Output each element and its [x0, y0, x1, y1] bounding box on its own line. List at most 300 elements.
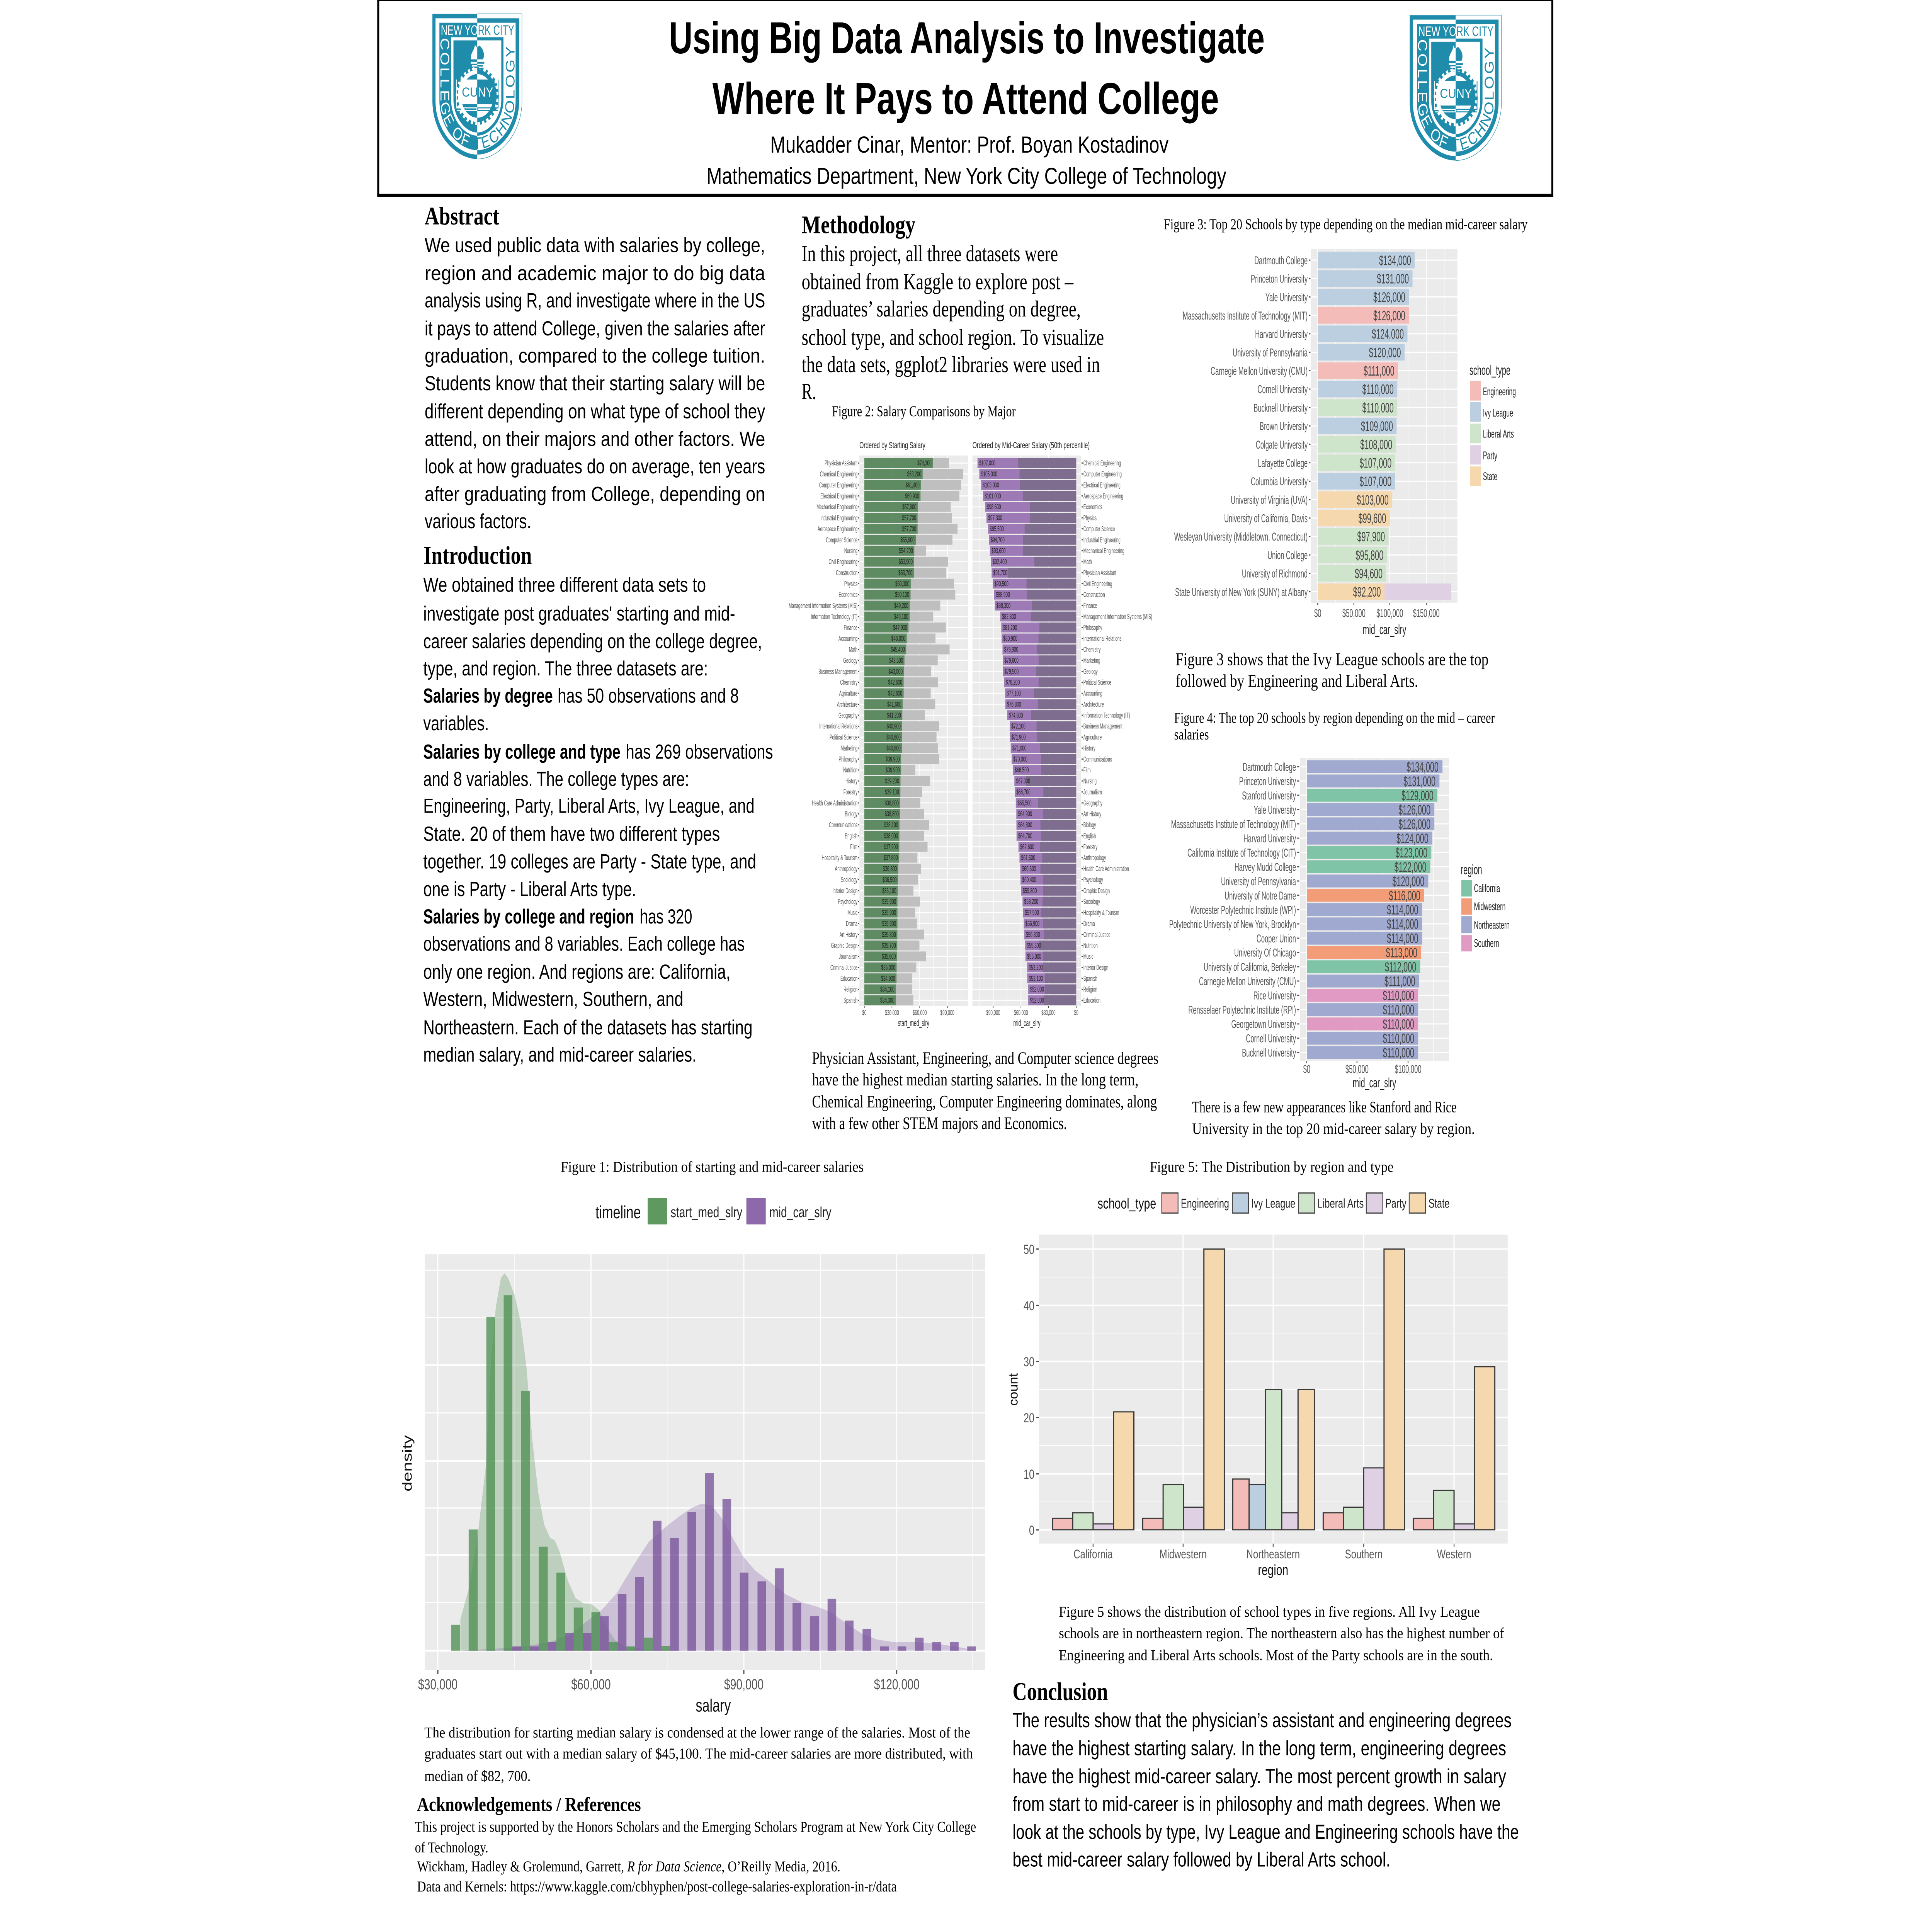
- text: introduction body: Northeastern. Each of the datasets has starting: [423, 1016, 753, 1039]
- axis labels: school names by type: Princeton University: [1251, 273, 1308, 286]
- bars: mid-career salary in gray: [864, 458, 963, 1005]
- text: introduction body: career salaries depending on the college degree,: [423, 630, 762, 653]
- value labels: schools by type: $110,000: [1362, 382, 1394, 397]
- value labels: mid-career salary: $68,500: [1015, 766, 1029, 774]
- axis labels: school names by region: Harvard University: [1243, 832, 1296, 845]
- value labels: mid-career salary: $60,400: [1022, 876, 1036, 884]
- value labels: schools by region: $129,000: [1401, 788, 1434, 803]
- axis labels: majors by mid-career salary: Anthropology: [1083, 854, 1106, 862]
- legend: school type: school_type: [1097, 1196, 1156, 1212]
- axis labels: majors by starting salary: Political Science: [830, 734, 857, 742]
- axis labels: school names by region: Bucknell University: [1242, 1047, 1296, 1060]
- text: figure 2 description: Physician Assistant, Engineering, and Computer science degrees: [812, 1049, 1158, 1068]
- axis labels: school names by region: Massachusetts Institute of Technology (MIT): [1171, 818, 1296, 831]
- axis labels: majors by mid-career salary: Architecture: [1083, 701, 1104, 709]
- value labels: schools by type: $131,000: [1377, 272, 1409, 287]
- axis labels: majors by starting salary: Anthropology: [835, 866, 857, 873]
- axis labels: majors by mid-career salary: Industrial Engineering: [1083, 536, 1121, 544]
- axis labels: school names by region: Stanford University: [1242, 789, 1296, 802]
- text: methodology body: In this project, all three datasets were: [802, 242, 1058, 267]
- value labels: schools by region: [1383, 760, 1439, 1061]
- x axis: mid-career salary: $0: [1074, 1009, 1078, 1017]
- bars: mid-career salary in light purple: [978, 458, 1076, 1005]
- text: conclusion body: have the highest mid-career salary. The most percent growth in salary: [1012, 1765, 1507, 1787]
- text: introduction body: Salaries by degree: [423, 684, 553, 707]
- value labels: schools by region: $110,000: [1383, 1003, 1414, 1018]
- value labels: starting salary: $63,200: [907, 470, 921, 478]
- x axis: starting salary: [862, 1006, 954, 1029]
- x axis: mid-career salary: mid_car_slry: [1014, 1018, 1041, 1029]
- value labels: schools by region: $110,000: [1383, 1031, 1414, 1046]
- chart: top schools by type: [1174, 249, 1516, 638]
- text: introduction body: investigate post graduates' starting and mid-: [423, 602, 735, 625]
- panel: introduction: [423, 542, 773, 1066]
- axis labels: majors by mid-career salary: Chemical Engineering: [1083, 460, 1121, 468]
- text: introduction body: observations and 8 variables. Each college has: [423, 932, 745, 955]
- icon: left college seal: CUNY: [462, 85, 493, 100]
- text: references: Data and Kernels: https://www.kaggle.com/cbhyphen/post-college-salaries-exploration-in-r/data: [417, 1878, 897, 1895]
- value labels: mid-career salary: $82,300: [1002, 613, 1016, 621]
- axis labels: majors by starting salary: Geology: [843, 657, 857, 665]
- value labels: mid-career salary: $56,300: [1026, 931, 1040, 939]
- value labels: starting salary: $53,900: [899, 558, 913, 566]
- axis labels: school names by region: Yale University: [1254, 804, 1296, 816]
- axis labels: majors by starting salary: Art History: [840, 931, 857, 939]
- legend: school type: Liberal Arts: [1318, 1196, 1364, 1211]
- text: introduction body: Salaries by college and region: [423, 905, 634, 928]
- chart title: ordered by mid-career salary: Ordered by Mid-Career Salary (50th percentile): [973, 440, 1090, 451]
- legend: timeline: start_med_slry: [671, 1204, 742, 1221]
- axis labels: majors by starting salary: Philosophy: [839, 756, 857, 764]
- axis labels: school names by region: Rice University: [1253, 990, 1296, 1002]
- axis labels: majors by mid-career salary: Spanish: [1083, 975, 1097, 983]
- axis labels: school names by region: University of Notre Dame: [1225, 889, 1296, 902]
- value labels: schools by region: $122,000: [1395, 860, 1427, 875]
- value labels: starting salary: $74,300: [917, 459, 932, 468]
- axis labels: school names by region: [1169, 761, 1298, 1060]
- value labels: starting salary: $38,800: [885, 799, 899, 807]
- text: introduction body: together. 19 colleges are Party - State type, and: [423, 850, 756, 873]
- value labels: schools by region: $131,000: [1403, 774, 1435, 789]
- axis labels: majors by starting salary: Drama: [846, 920, 858, 928]
- axis labels: majors by mid-career salary: Geology: [1083, 668, 1098, 676]
- value labels: starting salary: $35,000: [881, 964, 895, 972]
- value labels: starting salary: $39,200: [885, 777, 899, 786]
- caption: figure 4: salaries: [1174, 726, 1209, 743]
- value labels: starting salary: $35,900: [882, 909, 896, 917]
- value labels: starting salary: $41,200: [887, 711, 901, 719]
- axis labels: majors by starting salary: English: [845, 832, 857, 840]
- axis labels: majors by mid-career salary: Psychology: [1083, 876, 1103, 884]
- axis labels: school names by type: University of Pennsylvania: [1233, 346, 1308, 359]
- value labels: mid-career salary: $61,500: [1021, 854, 1035, 862]
- value labels: starting salary: $39,900: [886, 766, 900, 774]
- header banner: [377, 0, 1553, 197]
- value labels: mid-career salary: $79,600: [1005, 656, 1019, 665]
- value labels: starting salary: $38,000: [884, 832, 898, 840]
- x axis: schools by region: [1303, 1061, 1422, 1091]
- x axis: salary: [418, 1670, 920, 1716]
- axis labels: majors by starting salary: Economics: [839, 591, 857, 599]
- heading: abstract: Abstract: [425, 202, 499, 230]
- axis labels: school names by type: Wesleyan University (Middletown, Connecticut): [1174, 531, 1308, 544]
- density and histogram plot: [451, 1273, 976, 1651]
- axis labels: school names by region: Rensselaer Polytechnic Institute (RPI): [1188, 1004, 1296, 1017]
- value labels: starting salary: $46,000: [891, 635, 905, 643]
- axis labels: majors by starting salary: Physician Assistant: [825, 460, 858, 468]
- text: figure 5 description: [1059, 1604, 1505, 1664]
- value labels: starting salary: $36,100: [882, 887, 896, 895]
- legend: school type: Party: [1483, 449, 1497, 462]
- text: abstract body: it pays to attend College, given the salaries after: [425, 317, 765, 340]
- value labels: mid-career salary: $55,000: [1027, 952, 1041, 961]
- text: methodology body: the data sets, ggplot2 libraries were used in: [802, 352, 1100, 378]
- value labels: schools by type: $120,000: [1369, 345, 1401, 361]
- value labels: schools by type: $109,000: [1361, 419, 1393, 434]
- x axis: schools by type: $100,000: [1376, 607, 1403, 620]
- x axis: schools by region: $100,000: [1395, 1063, 1422, 1076]
- axis labels: school names by type: University of California, Davis: [1224, 512, 1308, 525]
- axis labels: majors by starting salary: Education: [840, 975, 857, 983]
- axis labels: majors by starting salary: Architecture: [837, 701, 857, 709]
- value labels: mid-career salary: $57,500: [1025, 909, 1039, 917]
- axis labels: majors by mid-career salary: International Relations: [1083, 635, 1122, 643]
- x axis: salary: $120,000: [874, 1677, 920, 1693]
- value labels: schools by type: $103,000: [1357, 493, 1389, 508]
- value labels: mid-career salary: $70,000: [1013, 755, 1027, 764]
- value labels: schools by region: $110,000: [1383, 1046, 1414, 1061]
- text: abstract body: We used public data with salaries by college,: [425, 234, 765, 257]
- value labels: schools by type: $124,000: [1372, 327, 1404, 342]
- legend: school type: Engineering: [1483, 385, 1516, 398]
- axis labels: majors by starting salary: Mechanical Engineering: [816, 503, 857, 511]
- legend: region: region: [1461, 862, 1482, 878]
- axis labels: majors by mid-career salary: Management Information Systems (MIS): [1083, 613, 1152, 621]
- value labels: schools by region: $111,000: [1384, 974, 1415, 989]
- value labels: mid-career salary: $105,000: [981, 470, 997, 478]
- text: references: [415, 1818, 976, 1895]
- title line 2: Where It Pays to Attend College: [713, 73, 1219, 124]
- axis labels: school names by region: Georgetown University: [1231, 1018, 1296, 1031]
- text: figure 1 description: The distribution for starting median salary is condensed at the lower range of the salaries. Most of the: [424, 1724, 970, 1741]
- value labels: mid-career salary: $71,000: [1012, 744, 1026, 752]
- histogram: mid-career salary: [512, 1473, 976, 1651]
- axis labels: majors by mid-career salary: Hospitality & Tourism: [1083, 909, 1119, 917]
- axis labels: school names by type: Union College: [1267, 549, 1308, 562]
- bars: starting salary in green: [864, 458, 933, 1005]
- axis labels: school names by type: Yale University: [1265, 291, 1308, 304]
- value labels: starting salary: $60,900: [905, 492, 919, 500]
- value labels: starting salary: $43,000: [889, 668, 903, 676]
- value labels: mid-career salary: $81,200: [1003, 624, 1017, 632]
- axis labels: majors by starting salary: Business Management: [818, 668, 858, 676]
- chart: distribution of starting and mid-career salaries: [400, 1198, 985, 1716]
- axis labels: school names by type: Carnegie Mellon University (CMU): [1211, 365, 1308, 378]
- text: figure 2 description: [812, 1049, 1158, 1133]
- axis labels: school names by region: Carnegie Mellon University (CMU): [1199, 975, 1296, 988]
- axis labels: majors by starting salary: Finance: [844, 624, 857, 632]
- text: introduction body: has 50 observations and 8: [558, 684, 739, 707]
- axis labels: majors by starting salary: Journalism: [839, 953, 857, 961]
- value labels: schools by type: $94,600: [1355, 566, 1383, 582]
- x axis: schools by type: [1314, 603, 1440, 638]
- axis labels: majors by mid-career salary: Mechanical Engineering: [1083, 548, 1124, 555]
- value labels: starting salary: $40,900: [887, 723, 901, 731]
- axis labels: majors by starting salary: Agriculture: [839, 690, 857, 698]
- value labels: schools by region: $114,000: [1387, 903, 1418, 918]
- axis labels: majors by starting salary: Electrical Engineering: [820, 493, 857, 500]
- axis labels: majors by mid-career salary: Civil Engineering: [1083, 580, 1112, 588]
- icon: right college seal: NEW YORK CITY: [1418, 24, 1493, 39]
- axis labels: school names by type: Bucknell University: [1253, 402, 1308, 415]
- axis labels: majors by starting salary: Aerospace Engineering: [818, 526, 857, 533]
- value labels: mid-career salary: $53,200: [1029, 964, 1043, 972]
- value labels: starting salary: $38,800: [885, 810, 899, 818]
- value labels: mid-career salary: $74,800: [1009, 711, 1023, 719]
- axis labels: school names by type: Dartmouth College: [1254, 254, 1308, 267]
- legend: school type: Party: [1385, 1196, 1406, 1211]
- text: methodology body: [802, 242, 1104, 404]
- caption: figure 4: [1174, 709, 1495, 743]
- value labels: starting salary: $42,600: [888, 689, 902, 698]
- heading: conclusion: Conclusion: [1012, 1678, 1108, 1706]
- text: figure 5 description: Engineering and Liberal Arts schools. Most of the Party schools are in the south.: [1059, 1647, 1493, 1664]
- axis labels: school names by type: Lafayette College: [1258, 457, 1308, 470]
- text: conclusion body: have the highest starting salary. In the long term, engineering degrees: [1012, 1737, 1506, 1760]
- axis labels: majors by starting salary: Geography: [838, 712, 857, 719]
- chart: distribution by region and type: [1006, 1193, 1508, 1578]
- title line 1: Using Big Data Analysis to Investigate: [669, 13, 1265, 63]
- panel: methodology: [802, 211, 1104, 404]
- y axis title: density: density: [400, 1435, 415, 1492]
- text: introduction body: has 320: [640, 905, 692, 928]
- x axis: schools by type: mid_car_slry: [1363, 622, 1406, 638]
- value labels: mid-career salary: $78,200: [1006, 679, 1020, 687]
- axis labels: majors by starting salary: Chemical Engineering: [820, 471, 857, 478]
- text: abstract body: graduation, compared to the college tuition.: [425, 344, 765, 367]
- text: references: Wickham, Hadley & Grolemund, Garrett, R for Data Science , O’Reilly Media, 2016.: [417, 1858, 840, 1875]
- value labels: starting salary: $40,800: [886, 744, 901, 752]
- legend: school type: Liberal Arts: [1483, 428, 1514, 440]
- axis labels: majors by starting salary: Computer Science: [826, 536, 857, 544]
- value labels: starting salary: $61,400: [905, 481, 920, 489]
- icon: right college seal: CUNY: [1440, 86, 1472, 101]
- text: introduction body: Western, Midwestern, Southern, and: [423, 988, 683, 1010]
- axis labels: majors by mid-career salary: Physician Assistant: [1083, 569, 1116, 577]
- x axis: region: region: [1258, 1562, 1288, 1578]
- text: introduction body: and 8 variables. The college types are:: [423, 767, 689, 790]
- value labels: mid-career salary: $55,300: [1027, 942, 1041, 950]
- axis labels: majors by starting salary: Accounting: [838, 635, 857, 643]
- value labels: mid-career salary: $93,600: [992, 547, 1005, 555]
- value labels: starting salary: $36,800: [883, 865, 897, 873]
- axis labels: majors by mid-career salary: Education: [1083, 997, 1100, 1005]
- axis labels: majors by mid-career salary: Geography: [1083, 799, 1102, 807]
- text: introduction body: [423, 573, 773, 1066]
- y axis: count: 30: [1024, 1355, 1034, 1369]
- text: conclusion body: from start to mid-career is in philosophy and math degrees. When we: [1012, 1793, 1501, 1815]
- text: figure 5 description: schools are in northeastern region. The northeastern also has the highest number of: [1059, 1625, 1505, 1642]
- value labels: schools by type: $95,800: [1355, 548, 1383, 563]
- text: figure 2 description: Chemical Engineering, Computer Engineering dominates, along: [812, 1092, 1157, 1111]
- x axis: schools by region: $0: [1303, 1063, 1310, 1076]
- axis labels: majors by starting salary: Physics: [844, 580, 857, 588]
- x axis: salary: $90,000: [724, 1677, 764, 1693]
- axis labels: majors by starting salary: Spanish: [844, 997, 857, 1005]
- text: conclusion body: [1012, 1709, 1519, 1871]
- text: conclusion body: best mid-career salary followed by Liberal Arts school.: [1012, 1848, 1390, 1871]
- value labels: schools by region: $120,000: [1392, 874, 1424, 889]
- x axis: mid-career salary: $30,000: [1041, 1009, 1056, 1017]
- y axis: count: [1006, 1243, 1039, 1538]
- bars: school type counts by region: [1053, 1249, 1495, 1530]
- value labels: schools by type: $97,900: [1357, 529, 1385, 545]
- value labels: mid-career salary: $59,800: [1023, 887, 1037, 895]
- x axis: salary: $30,000: [418, 1677, 457, 1693]
- axis labels: school names by region: University of California, Berkeley: [1204, 961, 1296, 974]
- value labels: mid-career salary: $95,500: [990, 525, 1004, 533]
- panel: acknowledgements and references: [415, 1793, 976, 1895]
- axis labels: school names by region: Worcester Polytechnic Institute (WPI): [1190, 904, 1296, 917]
- text: methodology body: graduates’ salaries depending on degree,: [802, 297, 1081, 322]
- value labels: schools by type: $126,000: [1373, 308, 1405, 324]
- text: figure 1 description: [424, 1724, 973, 1784]
- legend: school type: Ivy League: [1251, 1196, 1295, 1211]
- axis labels: school names by type: Columbia University: [1251, 475, 1308, 488]
- axis labels: majors by starting salary: Math: [849, 646, 857, 654]
- value labels: mid-career salary: $58,200: [1024, 898, 1038, 906]
- x axis: mid-career salary: $60,000: [1014, 1009, 1028, 1017]
- value labels: mid-career salary: $79,500: [1005, 668, 1019, 676]
- x axis: mid-career salary: $90,000: [986, 1009, 1000, 1017]
- x axis: starting salary: $90,000: [940, 1009, 954, 1017]
- value labels: starting salary: $39,900: [886, 755, 900, 764]
- axis labels: majors by mid-career salary: Finance: [1083, 602, 1097, 610]
- x axis: region: Western: [1437, 1548, 1471, 1561]
- axis labels: majors by mid-career salary: English: [1083, 832, 1096, 840]
- text: introduction body: median salary, and mid-career salaries.: [423, 1043, 696, 1066]
- legend: region: Southern: [1474, 937, 1499, 949]
- x axis: region: Southern: [1345, 1548, 1383, 1561]
- y axis: count: 20: [1024, 1411, 1034, 1425]
- value labels: mid-career salary: $94,700: [990, 536, 1005, 544]
- value labels: starting salary: $47,900: [893, 624, 907, 632]
- value labels: mid-career salary: $80,900: [1003, 635, 1017, 643]
- text: figure 3 description: followed by Engineering and Liberal Arts.: [1175, 671, 1418, 691]
- axis labels: majors by mid-career salary: Computer Engineering: [1083, 471, 1122, 478]
- value labels: mid-career salary: $90,500: [995, 580, 1009, 588]
- panel: mid-career salary bars: [973, 456, 1152, 1029]
- x axis: region: Northeastern: [1247, 1548, 1300, 1561]
- value labels: starting salary: $54,200: [899, 547, 913, 555]
- axis labels: school names by region: California Institute of Technology (CIT): [1187, 847, 1296, 859]
- value labels: mid-career salary: $56,900: [1026, 920, 1039, 928]
- axis labels: majors by mid-career salary: Construction: [1083, 591, 1105, 599]
- y axis: count: 0: [1029, 1524, 1034, 1538]
- value labels: starting salary: $35,900: [882, 898, 896, 906]
- text: introduction body: one is Party - Liberal Arts type.: [423, 878, 636, 901]
- heading: introduction: Introduction: [423, 542, 532, 570]
- value labels: schools by region: $110,000: [1383, 1017, 1414, 1032]
- authors: Mukadder Cinar, Mentor: Prof. Boyan Kostadinov: [770, 132, 1168, 158]
- text: introduction body: type, and region. The three datasets are:: [423, 657, 708, 680]
- value labels: schools by region: $110,000: [1383, 988, 1414, 1003]
- value labels: starting salary: $43,500: [889, 656, 903, 665]
- value labels: starting salary: $42,600: [888, 679, 902, 687]
- text: introduction body: State. 20 of them have two different types: [423, 822, 720, 845]
- y axis: count: 50: [1024, 1243, 1034, 1257]
- x axis: schools by region: mid_car_slry: [1353, 1075, 1396, 1091]
- text: conclusion body: The results show that the physician’s assistant and engineering degrees: [1012, 1709, 1512, 1731]
- axis labels: school names by region: Princeton University: [1239, 775, 1296, 788]
- value labels: mid-career salary: $66,700: [1016, 788, 1031, 796]
- panel: abstract: [425, 202, 765, 532]
- text: abstract body: look at how graduates do on average, ten years: [425, 455, 765, 478]
- legend: region: Midwestern: [1474, 900, 1505, 913]
- chart: salary comparisons by major: [789, 440, 1152, 1029]
- axis labels: majors by starting salary: Civil Engineering: [829, 558, 857, 566]
- axis labels: school names by region: Harvey Mudd College: [1235, 861, 1296, 874]
- value labels: schools by type: [1353, 253, 1411, 600]
- value labels: starting salary: $35,600: [882, 952, 896, 961]
- axis labels: majors by starting salary: History: [845, 778, 857, 786]
- text: references: This project is supported by the Honors Scholars and the Emerging Scholars Program at New York City College: [415, 1818, 976, 1835]
- value labels: schools by type: $134,000: [1379, 253, 1411, 268]
- axis labels: majors by mid-career salary: Forestry: [1083, 844, 1098, 851]
- value labels: schools by type: $99,600: [1359, 511, 1386, 526]
- caption: figure 3: Figure 3: Top 20 Schools by type depending on the median mid-career salary: [1164, 216, 1528, 233]
- text: abstract body: different depending on what type of school they: [425, 400, 765, 423]
- value labels: schools by region: $124,000: [1396, 831, 1429, 846]
- value labels: starting salary: $36,500: [883, 876, 896, 884]
- value labels: starting salary: $35,800: [882, 931, 896, 939]
- caption: figure 1: Figure 1: Distribution of starting and mid-career salaries: [561, 1158, 864, 1175]
- axis labels: school names by type: [1174, 254, 1310, 599]
- legend: region: California: [1474, 882, 1500, 895]
- value labels: starting salary: $35,900: [882, 920, 896, 928]
- axis labels: majors by starting salary: Biology: [845, 811, 857, 818]
- value labels: schools by region: $126,000: [1398, 817, 1430, 832]
- value labels: mid-career salary: $71,900: [1012, 733, 1026, 742]
- value labels: starting salary: $37,900: [884, 843, 898, 851]
- text: abstract body: [425, 234, 765, 532]
- value labels: mid-career salary: $103,000: [983, 481, 999, 489]
- value labels: schools by region: $126,000: [1398, 803, 1430, 818]
- value labels: schools by type: $107,000: [1359, 474, 1391, 490]
- axis labels: majors by starting salary: Religion: [844, 986, 857, 994]
- legend: region: Northeastern: [1474, 919, 1510, 931]
- value labels: starting salary: $50,100: [895, 591, 909, 599]
- legend: timeline: [595, 1198, 832, 1225]
- text: abstract body: region and academic major to do big data: [425, 262, 765, 284]
- histogram: starting salary: [451, 1295, 670, 1651]
- axis labels: majors by mid-career salary: Computer Science: [1083, 526, 1115, 533]
- text: figure 2 description: have the highest median starting salaries. In the long term,: [812, 1070, 1138, 1089]
- value labels: starting salary: $35,700: [882, 942, 896, 950]
- value labels: starting salary: $53,700: [898, 569, 912, 577]
- icon: left college seal: NEW YORK CITY: [441, 22, 514, 38]
- axis labels: majors by starting salary: Construction: [836, 569, 857, 577]
- value labels: starting salary: $34,900: [881, 975, 895, 983]
- axis labels: school names by type: Colgate University: [1256, 439, 1308, 451]
- axis labels: majors by mid-career salary: Communications: [1083, 756, 1112, 764]
- axis labels: school names by type: Brown University: [1260, 420, 1308, 433]
- x axis: starting salary: $0: [862, 1009, 866, 1017]
- axis labels: majors by mid-career salary: Film: [1083, 767, 1091, 774]
- text: methodology body: obtained from Kaggle to explore post –: [802, 269, 1074, 294]
- axis labels: majors by starting salary: Film: [850, 844, 857, 851]
- density: mid-career salary: [460, 1503, 976, 1651]
